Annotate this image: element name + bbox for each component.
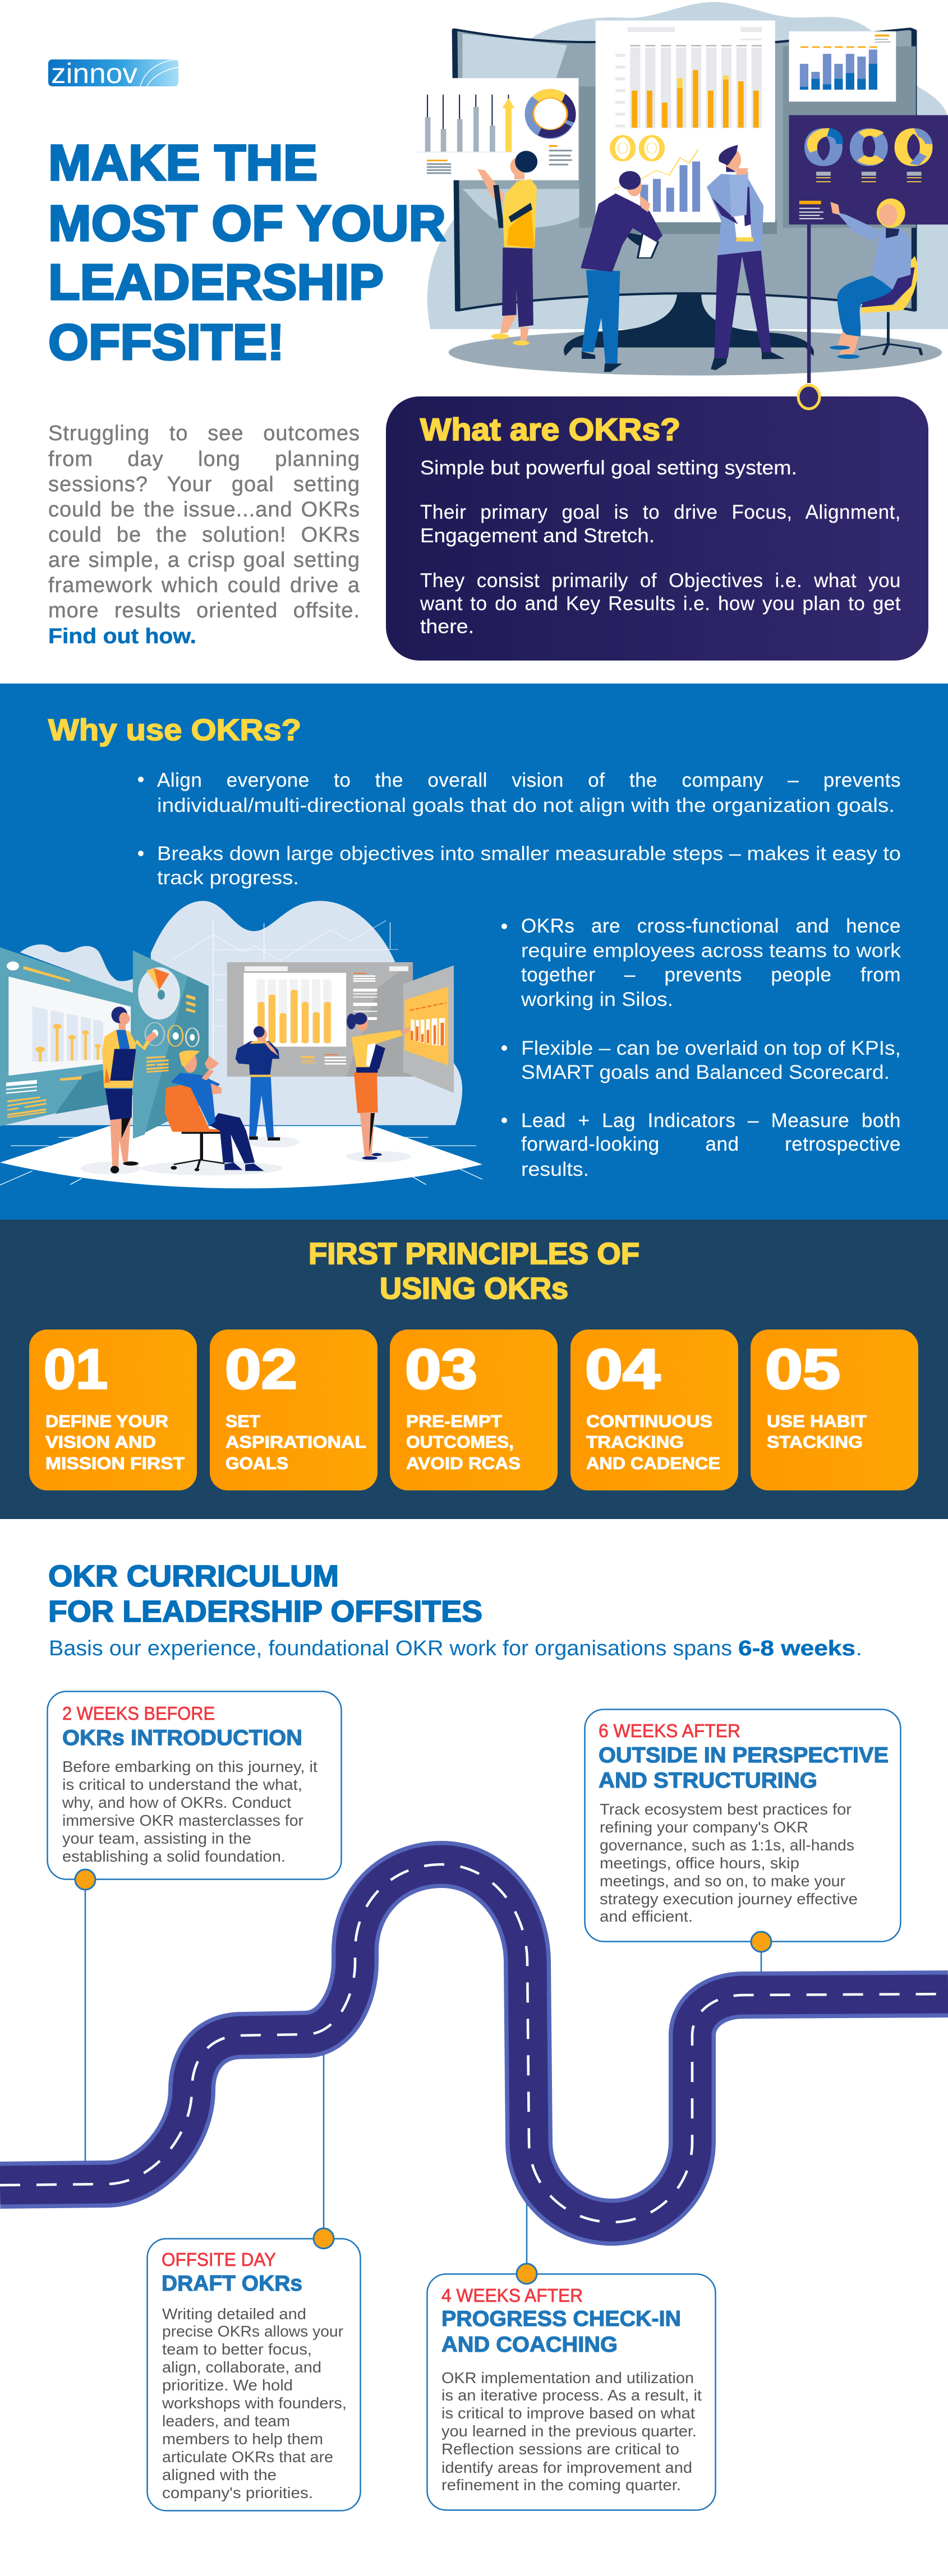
card: offsite day: members to help them bbox=[162, 2430, 323, 2448]
body text: Engagement and Stretch. bbox=[420, 525, 655, 547]
card 04: AND CADENCE bbox=[586, 1453, 720, 1473]
card 03: OUTCOMES, bbox=[406, 1432, 514, 1452]
body text: Their primary goal is to drive Focus, Alignment, bbox=[420, 502, 901, 523]
card 05: 05 bbox=[765, 1338, 840, 1401]
body text: want to do and Key Results i.e. how you plan to get bbox=[420, 593, 901, 615]
card 03: 03 bbox=[405, 1338, 477, 1401]
card: 2 weeks before: OKRs INTRODUCTION bbox=[62, 1726, 302, 1750]
intro text block: sessions? Your goal setting bbox=[48, 473, 360, 496]
figure: man from behind bbox=[236, 1026, 280, 1141]
bullet list: right: working in Silos. bbox=[521, 989, 673, 1010]
illustration: team reviewing dashboards bbox=[417, 2, 948, 383]
bullet list: top: individual/multi-directional goals that do not align with the organization goals. bbox=[157, 795, 895, 816]
card: 4 weeks after: Reflection sessions are critical to bbox=[441, 2440, 679, 2458]
figure: woman with folder bbox=[102, 1007, 158, 1174]
card 04: 04 bbox=[585, 1338, 660, 1401]
card: 4 weeks after: you learned in the previous quarter. bbox=[441, 2422, 697, 2440]
body text: Simple but powerful goal setting system. bbox=[420, 457, 797, 479]
panel: what are OKRs bbox=[386, 385, 928, 661]
panel: why use OKRs bbox=[0, 684, 948, 1220]
card 02 bbox=[210, 1329, 378, 1490]
card: offsite day: align, collaborate, and bbox=[162, 2358, 321, 2376]
body text: there. bbox=[420, 616, 474, 638]
intro text block: are simple, a crisp goal setting bbox=[48, 548, 360, 572]
title: MOST OF YOUR bbox=[48, 196, 446, 252]
heading: Why use OKRs? bbox=[48, 713, 301, 747]
card 01: VISION AND bbox=[45, 1432, 156, 1452]
panel: purple donut board on pole bbox=[789, 115, 948, 383]
intro text block: more results oriented offsite. bbox=[48, 599, 360, 622]
card 01: MISSION FIRST bbox=[45, 1453, 185, 1473]
connector lines bbox=[85, 1880, 761, 2274]
card 05: USE HABIT bbox=[767, 1411, 867, 1431]
bullet list: right: require employees across teams to work bbox=[521, 940, 901, 962]
card 02: ASPIRATIONAL bbox=[226, 1432, 366, 1452]
card: 4 weeks after bbox=[427, 2274, 716, 2510]
card 05: STACKING bbox=[767, 1432, 863, 1452]
card: 4 weeks after: is an iterative process. As a result, it bbox=[441, 2386, 702, 2404]
card 04 bbox=[570, 1329, 738, 1490]
illustration: team at data screens bbox=[0, 901, 482, 1188]
subheading: . bbox=[856, 1637, 862, 1660]
card: 4 weeks after: refinement in the coming quarter. bbox=[441, 2476, 681, 2494]
card: 6 weeks after: AND STRUCTURING bbox=[599, 1769, 817, 1793]
panel: left chart board bbox=[417, 78, 578, 180]
card: offsite day: prioritize. We hold bbox=[162, 2376, 293, 2394]
card 03 bbox=[390, 1329, 558, 1490]
card: offsite day: articulate OKRs that are bbox=[162, 2448, 333, 2466]
card 03: PRE-EMPT bbox=[406, 1411, 502, 1431]
card: offsite day: DRAFT OKRs bbox=[162, 2272, 302, 2296]
card 05 bbox=[751, 1329, 918, 1490]
card: 4 weeks after: OKR implementation and utilization bbox=[441, 2369, 694, 2386]
figure: man in chair bbox=[164, 1050, 264, 1171]
card: 6 weeks after bbox=[585, 1709, 901, 1941]
subheading: 6-8 weeks bbox=[738, 1637, 855, 1660]
card: 2 weeks before: 2 WEEKS BEFORE bbox=[62, 1703, 215, 1724]
intro text block bbox=[48, 422, 360, 648]
card: 2 weeks before: is critical to understand the what, bbox=[62, 1776, 302, 1793]
intro text block: Struggling to see outcomes bbox=[48, 422, 360, 445]
heading: OKR curriculum: OKR CURRICULUM bbox=[48, 1559, 339, 1593]
bullet list: right: OKRs are cross-functional and hence bbox=[521, 916, 901, 937]
bullet list: right: SMART goals and Balanced Scorecard. bbox=[521, 1061, 890, 1083]
panel: top right bar chart bbox=[789, 31, 896, 101]
card: 6 weeks after: meetings, and so on, to make your bbox=[600, 1872, 845, 1890]
bullet list: right: results. bbox=[521, 1158, 589, 1180]
body text: They consist primarily of Objectives i.e. what you bbox=[420, 570, 901, 592]
card 02: SET bbox=[226, 1411, 260, 1431]
card: 2 weeks before: immersive OKR masterclasses for bbox=[62, 1812, 303, 1829]
bullet list: top: Align everyone to the overall vision of the company – prevents bbox=[157, 770, 901, 791]
card: 6 weeks after: OUTSIDE IN PERSPECTIVE bbox=[599, 1743, 889, 1767]
title bbox=[48, 135, 446, 371]
card: 6 weeks after: strategy execution journey effective bbox=[600, 1890, 858, 1908]
intro text block: Find out how. bbox=[48, 625, 196, 648]
card: 4 weeks after: 4 WEEKS AFTER bbox=[441, 2285, 583, 2306]
intro text block: framework which could drive a bbox=[48, 574, 360, 597]
card: offsite day: Writing detailed and bbox=[162, 2305, 306, 2323]
card 04: CONTINUOUS bbox=[586, 1411, 712, 1431]
card: 6 weeks after: refining your company's OKR bbox=[600, 1818, 808, 1836]
card: offsite day: precise OKRs allows your bbox=[162, 2323, 343, 2340]
title: OFFSITE! bbox=[48, 315, 284, 371]
heading: FIRST PRINCIPLES OF bbox=[309, 1237, 639, 1271]
logo: zinnov bbox=[48, 58, 178, 89]
heading bbox=[309, 1237, 639, 1305]
card: offsite day: workshops with founders, bbox=[162, 2394, 347, 2412]
panel: centre bar chart board bbox=[596, 21, 775, 222]
card: 4 weeks after: is critical to improve based on what bbox=[441, 2404, 695, 2422]
title: LEADERSHIP bbox=[48, 255, 384, 311]
card 01: 01 bbox=[44, 1338, 108, 1401]
figure: woman presenting bbox=[347, 1013, 411, 1160]
intro text block: could be the solution! OKRs bbox=[48, 523, 360, 547]
panel: first principles bbox=[0, 1220, 948, 1519]
card 02: 02 bbox=[225, 1338, 297, 1401]
intro text block: from day long planning bbox=[48, 447, 360, 471]
figures: four colleagues bbox=[477, 145, 922, 372]
card: 2 weeks before: your team, assisting in the bbox=[62, 1830, 251, 1847]
card 01 bbox=[29, 1329, 197, 1490]
bullet list: right: Lead + Lag Indicators – Measure both bbox=[521, 1110, 901, 1132]
card: offsite day: OFFSITE DAY bbox=[162, 2249, 276, 2270]
card: 2 weeks before: why, and how of OKRs. Conduct bbox=[62, 1794, 291, 1811]
heading: USING OKRs bbox=[380, 1272, 568, 1305]
bullet list: right: together – prevents people from bbox=[521, 964, 901, 986]
bullet list: right: Flexible – can be overlaid on top of KPIs, bbox=[521, 1037, 901, 1059]
timeline dots bbox=[75, 1869, 771, 2284]
road timeline bbox=[0, 1864, 948, 2222]
card: offsite day bbox=[147, 2238, 360, 2511]
card: offsite day: leaders, and team bbox=[162, 2412, 290, 2430]
card: 6 weeks after: 6 WEEKS AFTER bbox=[599, 1720, 740, 1741]
heading: What are OKRs? bbox=[420, 412, 680, 447]
card: offsite day: aligned with the bbox=[162, 2466, 277, 2483]
bullet list: right bbox=[501, 916, 901, 1180]
card: offsite day: company's priorities. bbox=[162, 2484, 313, 2501]
logo: zinnov: zinnov bbox=[51, 58, 137, 89]
card 01: DEFINE YOUR bbox=[45, 1411, 168, 1431]
card 03: AVOID RCAS bbox=[406, 1453, 521, 1473]
title: MAKE THE bbox=[48, 135, 317, 191]
subheading: Basis our experience, foundational OKR work for organisations spans bbox=[49, 1637, 732, 1660]
bullet list: top: track progress. bbox=[157, 867, 299, 889]
bullet list: right: forward-looking and retrospective bbox=[521, 1134, 901, 1155]
card 02: GOALS bbox=[226, 1453, 288, 1473]
card: 6 weeks after: governance, such as 1:1s, all-hands bbox=[600, 1836, 854, 1854]
card: 6 weeks after: meetings, office hours, skip bbox=[600, 1854, 799, 1872]
heading: OKR curriculum bbox=[48, 1559, 482, 1628]
body text bbox=[420, 457, 901, 638]
card: 4 weeks after: PROGRESS CHECK-IN bbox=[441, 2307, 681, 2331]
bullet list: top: Breaks down large objectives into smaller measurable steps – makes it easy to bbox=[157, 843, 901, 865]
card: 2 weeks before: establishing a solid foundation. bbox=[62, 1848, 286, 1865]
card: 4 weeks after: AND COACHING bbox=[441, 2333, 618, 2357]
card: 2 weeks before bbox=[47, 1691, 341, 1880]
card: 6 weeks after: and efficient. bbox=[600, 1908, 693, 1925]
intro text block: could be the issue...and OKRs bbox=[48, 498, 360, 521]
bullet list: top bbox=[138, 770, 901, 889]
card: 4 weeks after: identify areas for improvement and bbox=[441, 2459, 692, 2476]
heading: OKR curriculum: FOR LEADERSHIP OFFSITES bbox=[48, 1595, 482, 1628]
card 04: TRACKING bbox=[586, 1432, 684, 1452]
card: 6 weeks after: Track ecosystem best practices for bbox=[600, 1801, 852, 1818]
card: offsite day: team to better focus, bbox=[162, 2340, 312, 2358]
card: 2 weeks before: Before embarking on this journey, it bbox=[62, 1758, 317, 1775]
backdrop blob bbox=[427, 2, 948, 376]
